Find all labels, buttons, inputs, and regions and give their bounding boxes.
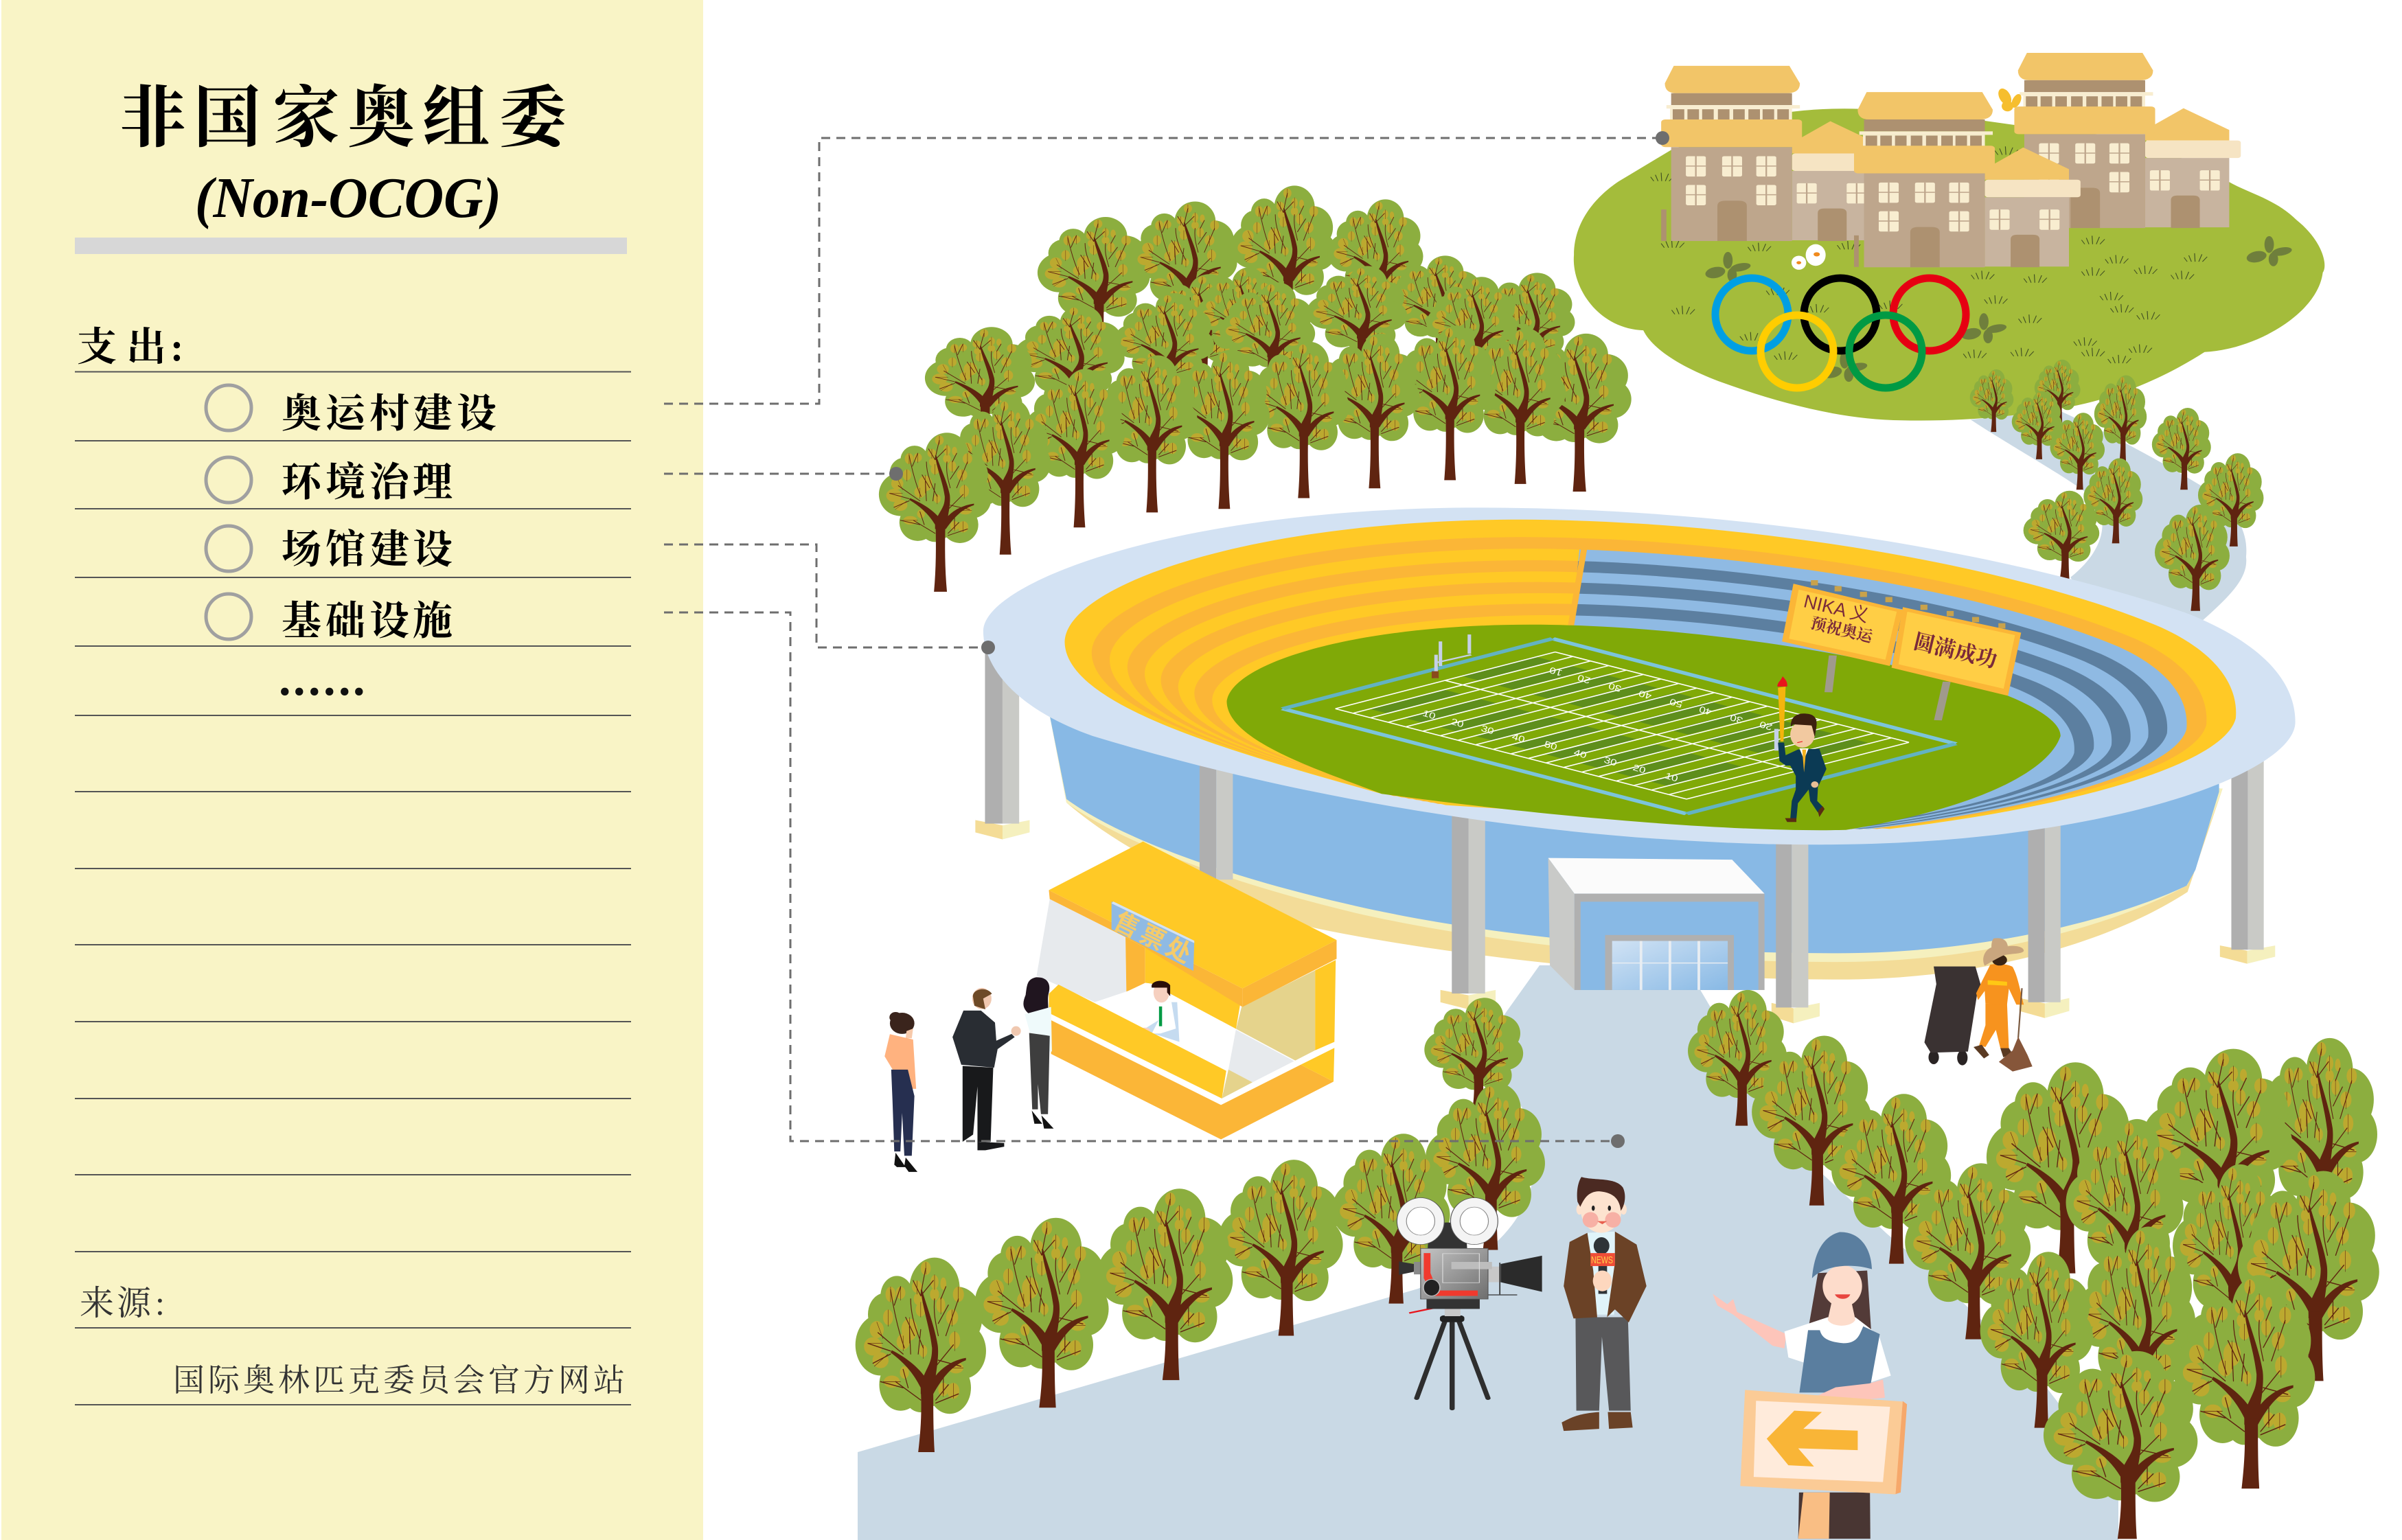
connector: infrastructure [664,612,1625,1148]
billboard text: NIKA 义 [1802,590,1871,626]
pitch yard numbers: 20 [1759,719,1774,732]
item: venue construction: 场馆建设 [282,527,453,572]
foreground figures [1397,1177,1907,1539]
ellipsis item: ...... [279,653,365,706]
trees lower-right cluster [1905,1038,2379,1539]
pillars [975,648,2275,1023]
guide girl with arrow sign [1713,1232,1907,1539]
entrance [1548,858,1765,990]
stadium rim [983,507,2296,844]
pitch yard numbers: 10 [1548,665,1564,678]
ruled lines [75,372,631,1405]
checkbox circles [206,385,251,639]
queueing people [884,977,1053,1172]
worker [1974,938,2033,1072]
green hill [1574,108,2324,421]
grass tufts [1651,146,2207,363]
item: Olympic village construction: 奥运村建设 [282,391,496,436]
stadium [975,507,2296,1023]
booth roof [1049,890,1242,1007]
pitch yard numbers [1421,665,1774,784]
sanitation worker with bin [1924,938,2033,1072]
pitch yard numbers: 40 [1572,748,1588,761]
pitch yard numbers: 30 [1480,724,1495,737]
item: infrastructure: 基础设施 [282,599,453,643]
connector: venue [664,544,995,654]
icon: butterfly [1996,88,2023,111]
booth sign text: 售票处 [1110,907,1200,970]
woman in orange top [884,1012,917,1172]
billboard text [1802,590,2000,672]
forest behind stadium [879,185,1632,592]
heading divider bar [75,238,627,254]
illustration: Olympic village hill [1574,53,2324,630]
stadium base band [1049,711,2223,980]
connector: environment [664,467,903,481]
man in dark suit [952,988,1021,1150]
pitch yard numbers: 50 [1543,739,1558,752]
trees lower-left row [856,990,1951,1452]
wheelie bin [1924,967,1983,1066]
buildings [1661,53,2241,267]
connector: Olympic village [664,131,1669,404]
path to village [1971,411,2246,630]
pitch yard numbers: 20 [1577,672,1592,685]
pitch yard numbers: 30 [1603,755,1618,768]
subtitle: (Non-OCOG) [195,166,501,230]
pitch yard numbers: 20 [1632,763,1647,776]
booth clerk [1139,981,1180,1042]
microphone NEWS tag: NEWS [1591,1254,1613,1266]
pitch yard numbers: 40 [1698,704,1713,717]
main road [858,965,2118,1540]
billboards [1782,580,2021,720]
pitch yard numbers: 50 [1669,696,1684,709]
film camera on tripod [1397,1198,1542,1409]
booth walls [1037,899,1126,1002]
pitch yard numbers: 30 [1608,680,1623,693]
item: environmental management: 环境治理 [282,460,453,505]
billboard text: 圆满成功 [1911,629,2000,672]
billboard text: 预祝奥运 [1809,614,1875,646]
seating stands east [1574,549,2187,829]
booth counter [1049,985,1226,1099]
pitch yard numbers: 40 [1638,688,1653,701]
panel: left sidebar [1,0,703,1540]
leaf clusters [1702,236,2294,382]
icon: white flowers [1792,244,1826,270]
expenditure heading: 支出: [77,325,183,369]
news reporter [1562,1177,1647,1431]
goal post [1435,634,1471,678]
stadium blue wall [1049,669,2219,953]
source text: 国际奥林匹克委员会官方网站 [173,1363,625,1398]
small trees along path [1970,360,2263,611]
torchbearer [1774,676,1827,822]
ticket booth [1037,842,1336,1140]
booth sign [1112,901,1194,971]
football field [1283,639,1956,814]
seating stands west [1065,520,2236,829]
woman with long hair [1023,977,1053,1129]
title: 非国家奥组委 [119,82,569,156]
pitch surround [1226,625,2061,830]
pitch yard numbers: 40 [1511,732,1526,745]
pitch yard numbers: 30 [1729,712,1744,725]
pitch yard numbers: 20 [1450,717,1465,730]
pitch yard numbers: 10 [1664,771,1679,784]
icon: Olympic rings [1715,278,1966,388]
pitch yard numbers: 10 [1421,709,1437,722]
source label: 来源: [80,1284,165,1322]
